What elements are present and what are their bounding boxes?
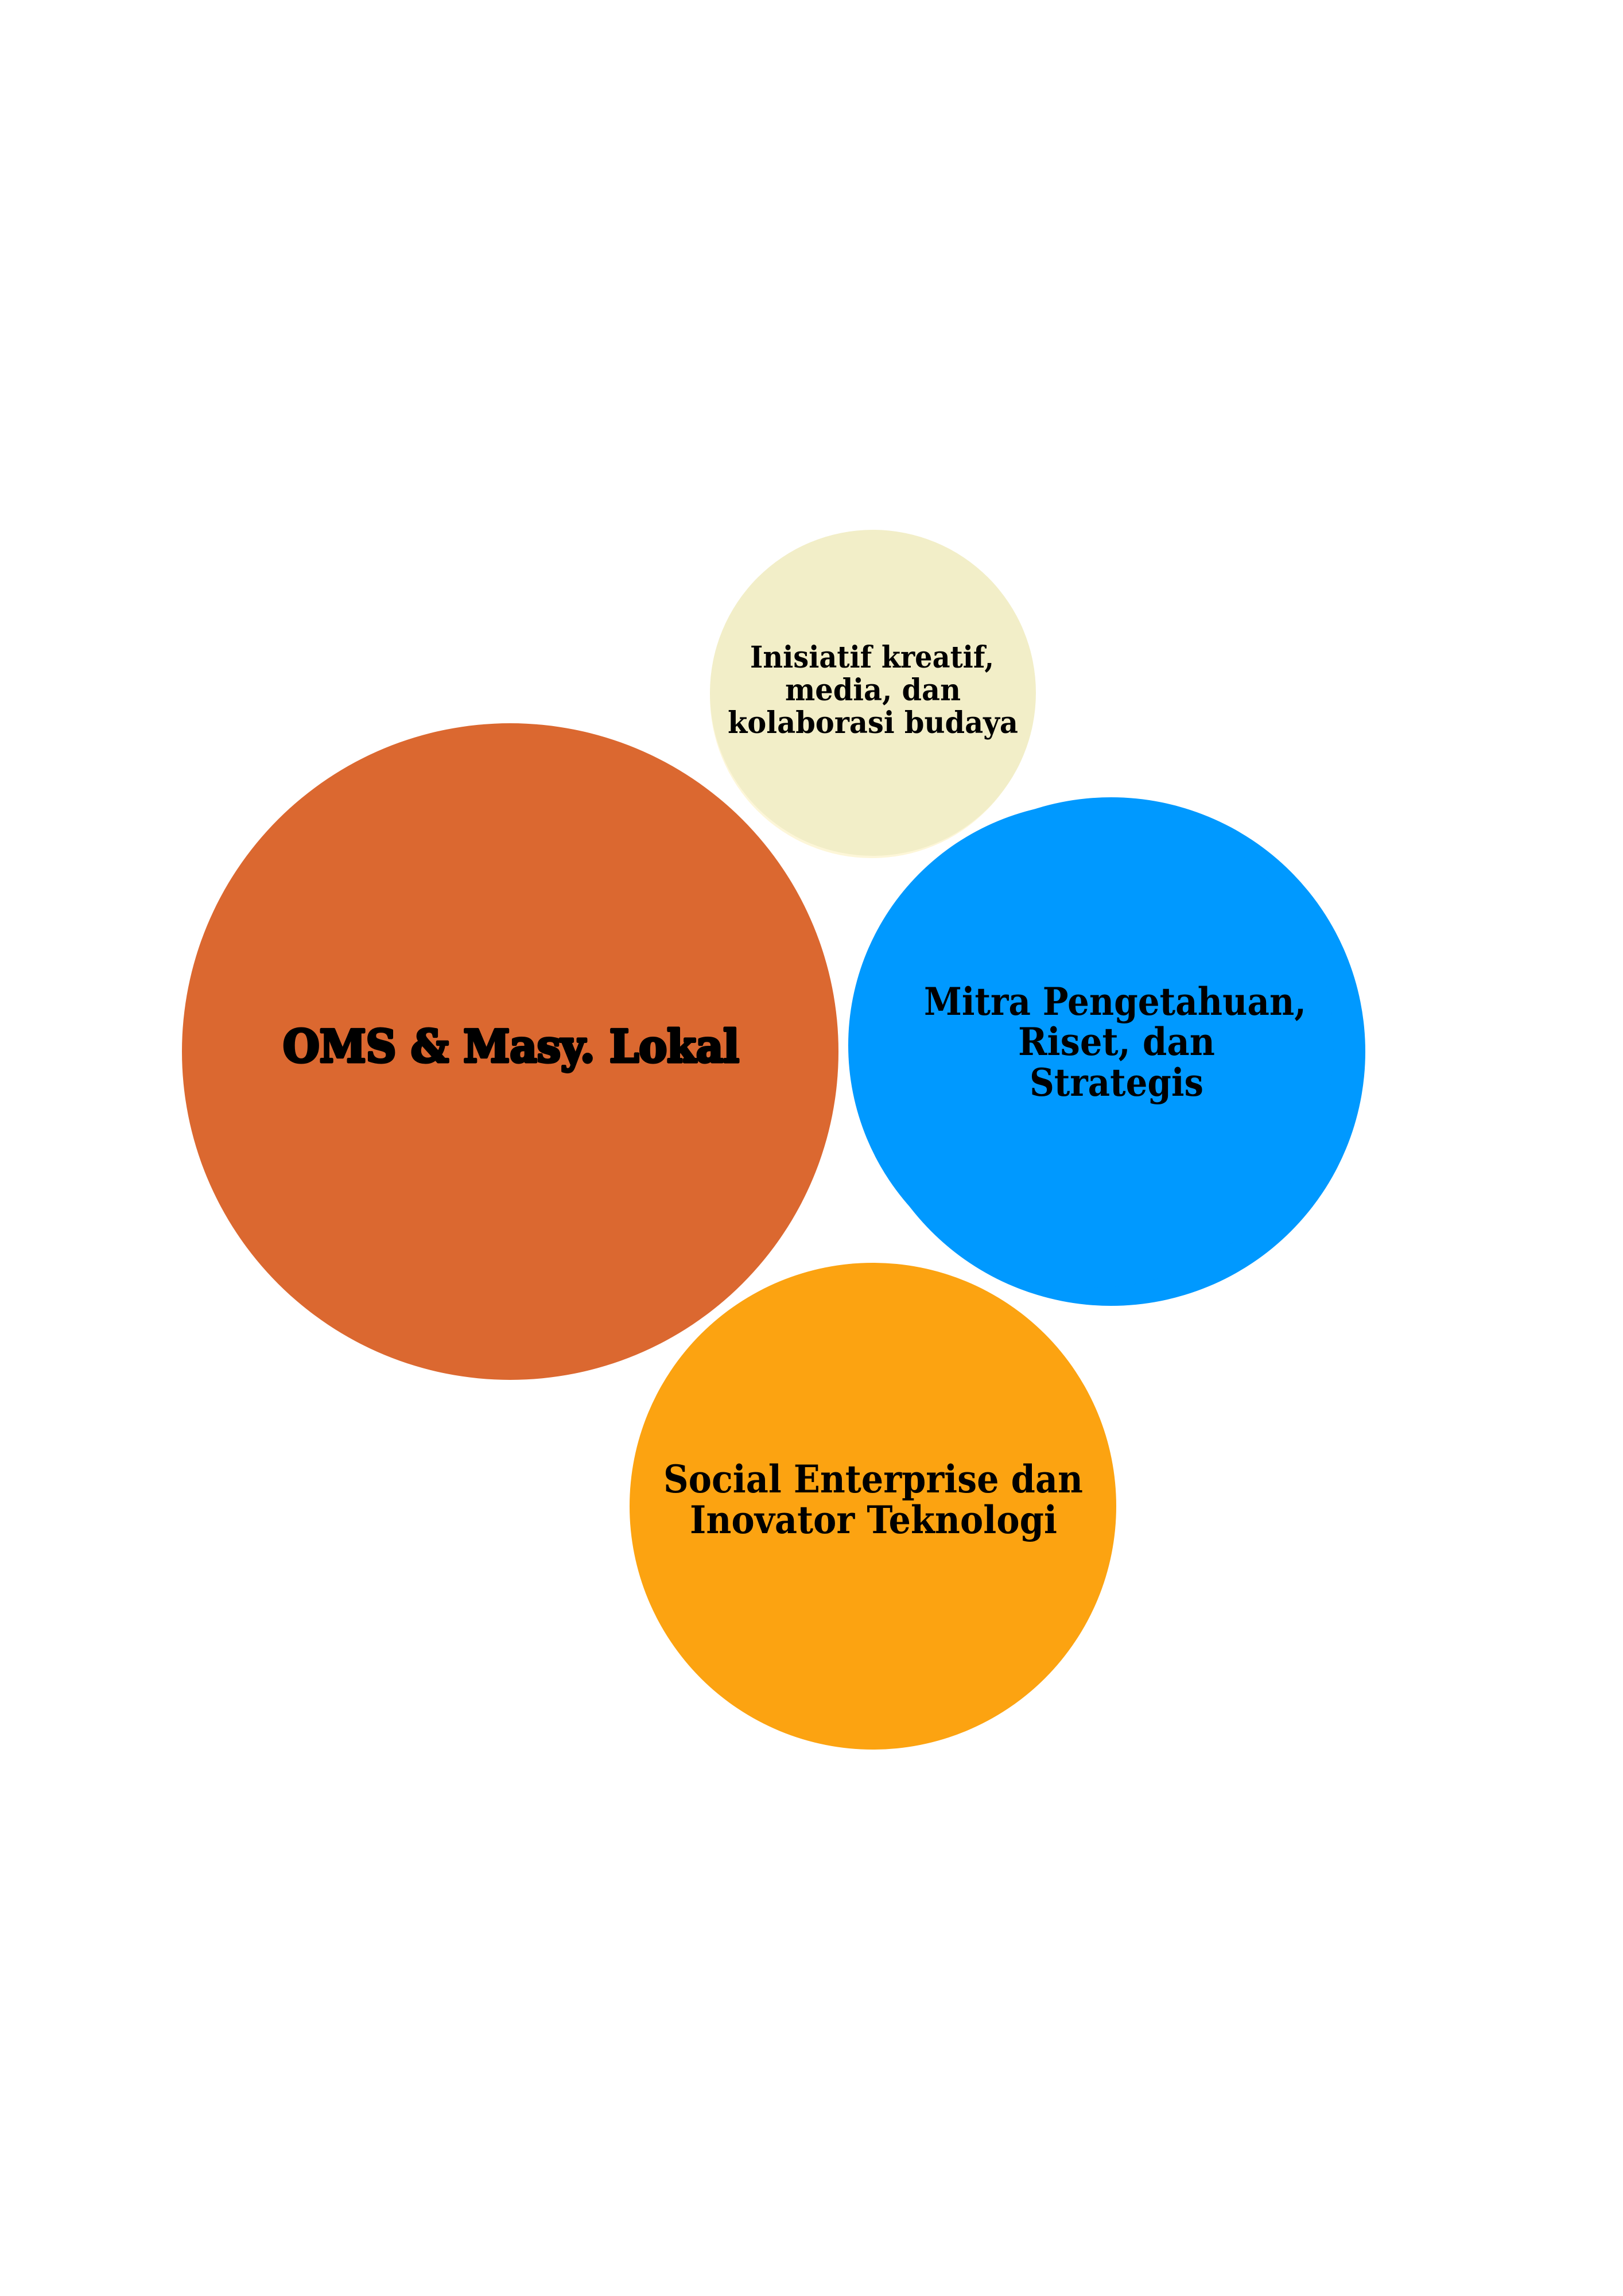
label: Inisiatif kreatif, media, dan kolaborasi budaya	[728, 640, 1018, 740]
label: Mitra Pengetahuan, Riset, dan Strategis: Riset, dan	[1018, 1019, 1215, 1064]
panel: OMS & Masy. Lokal bubble	[182, 723, 838, 1380]
label: Social Enterprise dan Inovator Teknologi	[663, 1457, 1083, 1542]
panel: Mitra Pengetahuan bubble	[848, 797, 1365, 1306]
label: Mitra Pengetahuan, Riset, dan Strategis	[924, 979, 1306, 1105]
label: Social Enterprise dan Inovator Teknologi: Inovator Teknologi	[690, 1498, 1057, 1542]
label: Mitra Pengetahuan, Riset, dan Strategis: Mitra Pengetahuan,	[924, 979, 1306, 1024]
label: Mitra Pengetahuan, Riset, dan Strategis: Strategis	[1030, 1060, 1203, 1105]
label: OMS & Masy. Lokal: OMS & Masy. Lokal	[283, 1021, 739, 1073]
panel: Social Enterprise bubble	[630, 1263, 1116, 1750]
panel: Inisiatif kreatif bubble	[710, 530, 1036, 858]
label: Inisiatif kreatif, media, dan kolaborasi budaya: media, dan	[785, 673, 961, 708]
label: Inisiatif kreatif, media, dan kolaborasi budaya: Inisiatif kreatif,	[750, 640, 994, 675]
label: Social Enterprise dan Inovator Teknologi: Social Enterprise dan	[663, 1457, 1083, 1502]
label: Inisiatif kreatif, media, dan kolaborasi budaya: kolaborasi budaya	[728, 705, 1018, 740]
